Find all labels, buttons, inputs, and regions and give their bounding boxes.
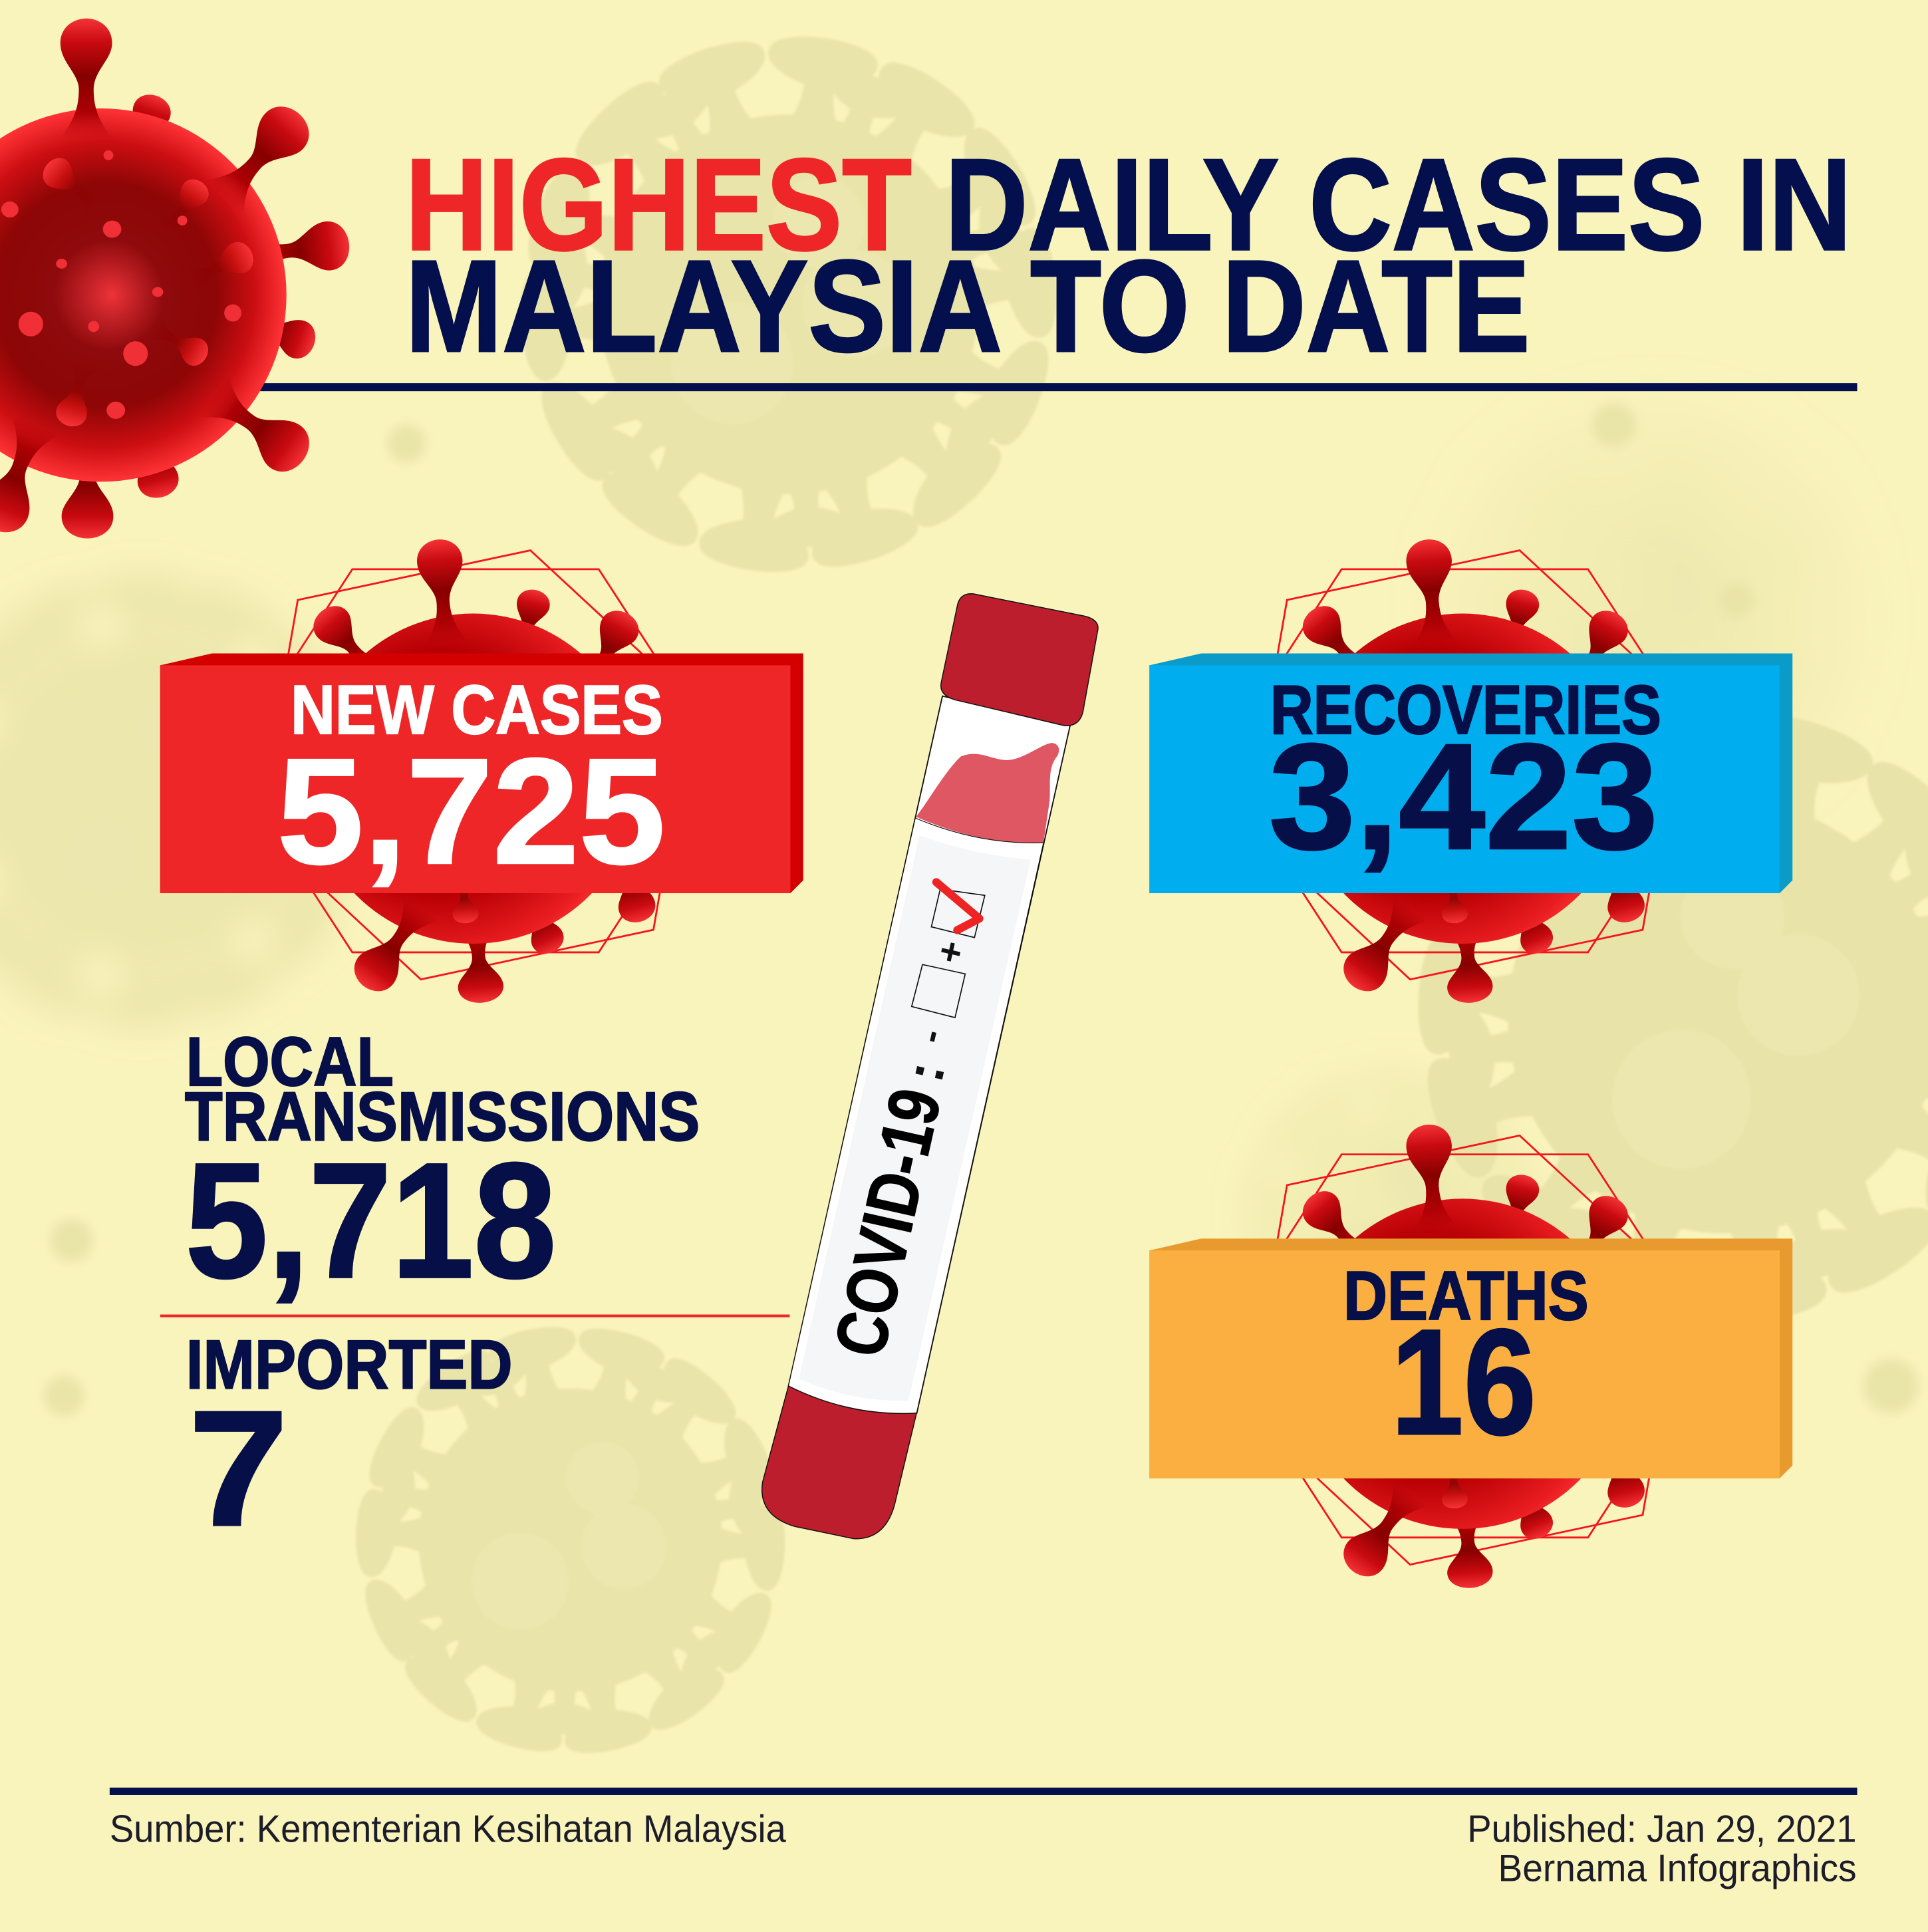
blood fill: [916, 743, 1059, 843]
icon: virus with hexagons: [1217, 537, 1713, 1004]
colon: :: [894, 1056, 957, 1087]
top cap: [941, 594, 1098, 726]
negative checkbox: [912, 964, 965, 1018]
footer rule: [110, 1788, 1857, 1795]
label: local transmissions line 2: TRANSMISSIONS: [185, 1077, 700, 1155]
value: imported: 7: [188, 1377, 288, 1560]
box side faces: [1149, 654, 1792, 893]
ghost virus: middle right blurred: [1241, 1071, 1544, 1368]
panel: recoveries: [1149, 537, 1792, 1004]
panel: new cases: [160, 537, 803, 1004]
icon: virus with hexagons: [1217, 1123, 1713, 1589]
value: new cases: 5,725: [277, 727, 665, 895]
title: [405, 131, 1852, 379]
panel: case breakdown: [160, 1023, 789, 1560]
heading rule: [246, 383, 1857, 391]
red check mark: [936, 882, 980, 930]
positive checkbox: [931, 889, 985, 938]
label: local transmissions line 1: LOCAL: [186, 1023, 394, 1100]
title line 1 highlight: HIGHEST: [405, 131, 912, 277]
value: local transmissions: 5,718: [186, 1129, 556, 1312]
label: imported: IMPORTED: [186, 1326, 513, 1403]
title line 2: MALAYSIA TO DATE: [405, 233, 1530, 379]
blurred background dots: [45, 403, 1918, 1415]
icon: blood sample tube: [762, 594, 1098, 1539]
value: recoveries: 3,423: [1269, 712, 1658, 881]
icon: virus with hexagons: [228, 537, 723, 1004]
box side faces: [1149, 1238, 1792, 1478]
publication details: [1467, 1808, 1857, 1890]
ghost virus: upper right blurred: [1455, 424, 1846, 808]
source credit: Sumber: Kementerian Kesihatan Malaysia: [110, 1808, 786, 1850]
label sheet: [789, 818, 1043, 1413]
box front: [160, 665, 790, 893]
icon: large virus: [0, 19, 352, 539]
box front: [1149, 665, 1780, 893]
divider line: [160, 1315, 789, 1317]
tube body: [789, 696, 1070, 1413]
ghost virus: bottom left: [303, 1276, 837, 1804]
publisher: Bernama Infographics: [1498, 1848, 1857, 1890]
ghost virus: top centre: [480, 1, 1097, 609]
panel: deaths: [1149, 1123, 1792, 1589]
bottom cap: [762, 1386, 916, 1539]
label: new cases: NEW CASES: [291, 671, 663, 748]
ghost virus: left blurred: [0, 574, 373, 1028]
box side faces: [160, 654, 803, 893]
plus sign: +: [928, 937, 973, 967]
published date: Published: Jan 29, 2021: [1467, 1808, 1857, 1850]
box front: [1149, 1250, 1780, 1478]
ghost virus: right: [1372, 669, 1928, 1364]
value: deaths: 16: [1391, 1298, 1536, 1466]
label: recoveries: RECOVERIES: [1270, 671, 1661, 748]
label inner panel: [799, 835, 1031, 1401]
tube label text: COVID-19: [819, 1081, 956, 1363]
label: deaths: DEATHS: [1343, 1257, 1589, 1334]
minus sign: -: [908, 1026, 952, 1047]
